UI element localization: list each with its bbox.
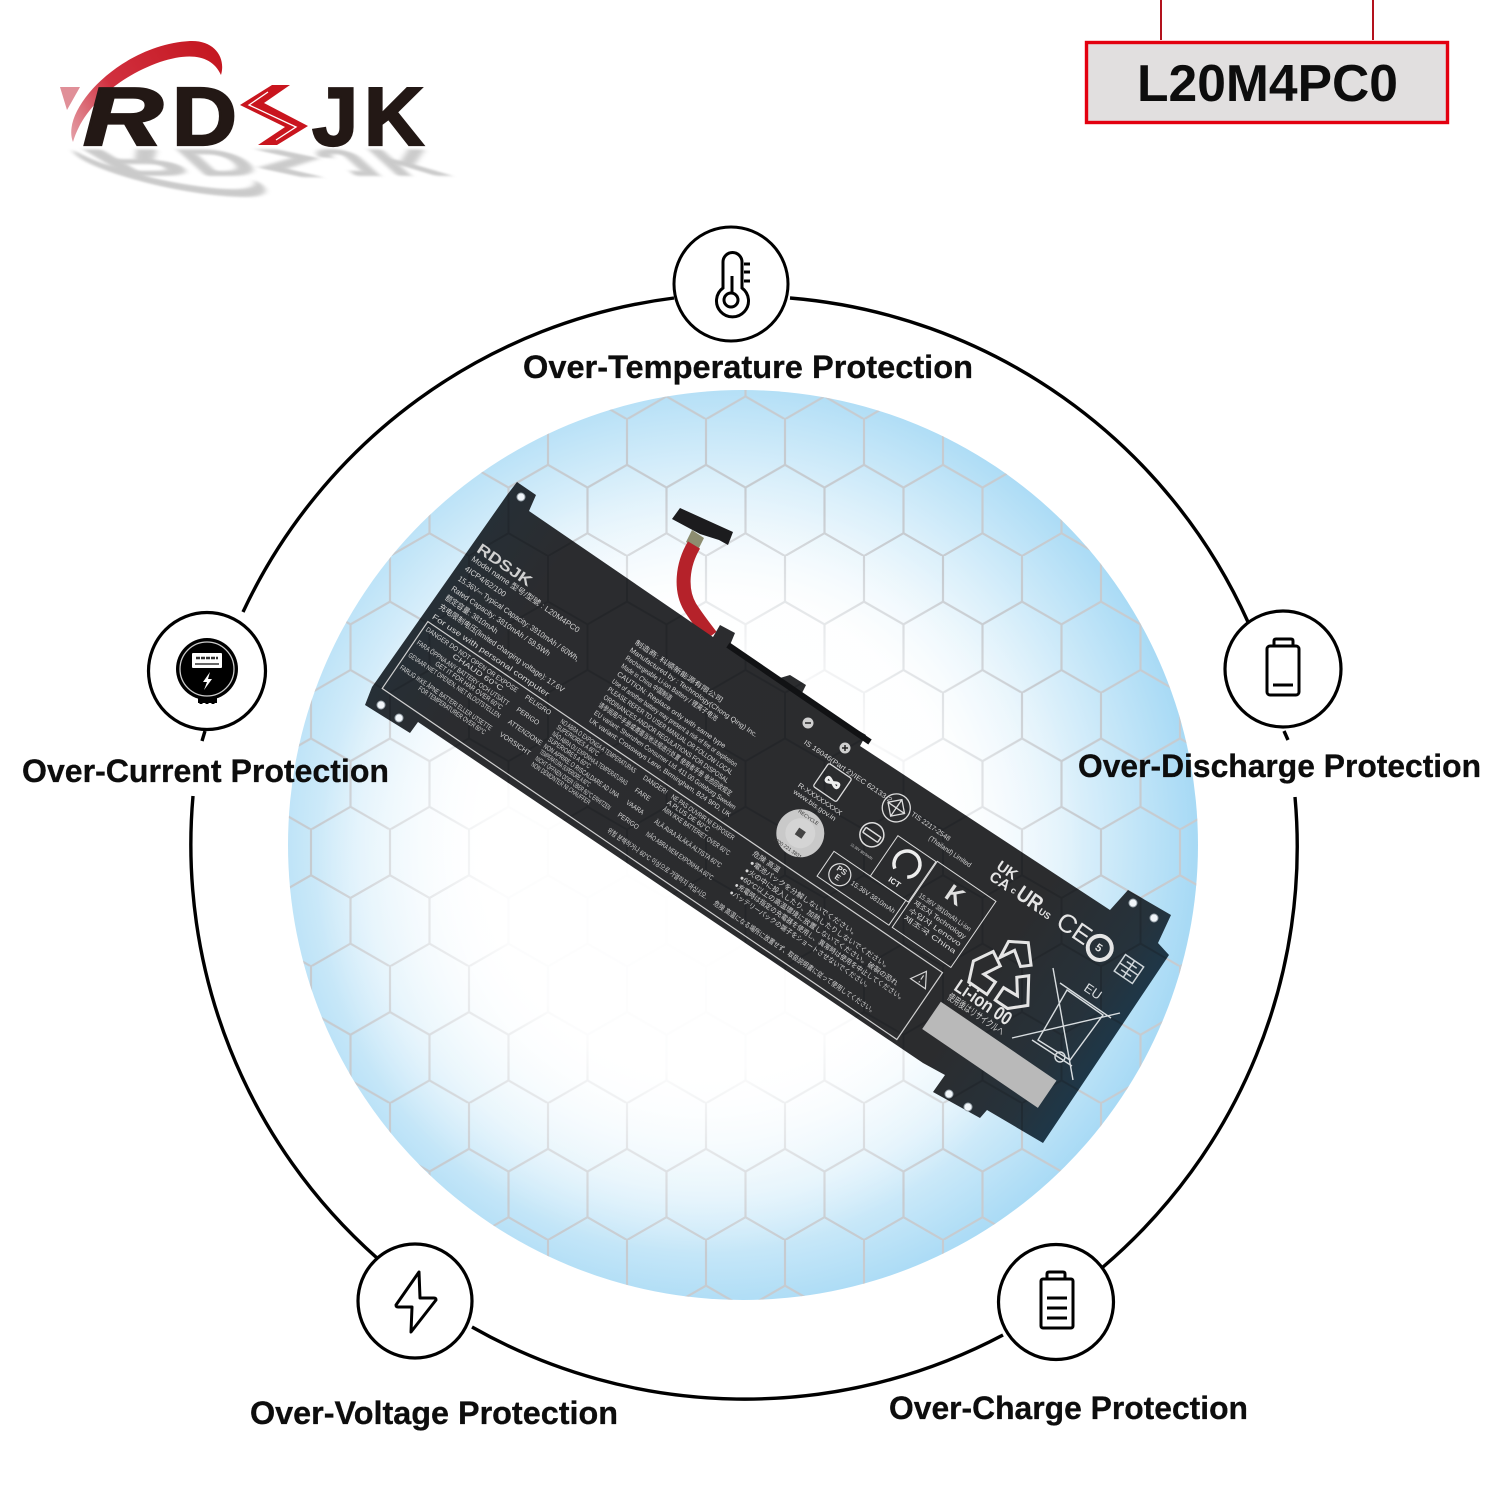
specification text: Model name 型号/型號 : L20M4PC0 xyxy=(470,554,583,635)
battery wires and connector xyxy=(672,508,733,636)
battery xyxy=(360,480,1175,1150)
outer ring xyxy=(191,298,1297,1399)
manufacturer text: UK variant: Crossways Lane, Birmingham, B24 9PD, UK xyxy=(587,717,732,819)
specification text: For use with personal computer xyxy=(430,612,552,699)
warning text middle: VORSICHT xyxy=(498,731,532,758)
S mark: 5 xyxy=(1093,942,1104,955)
label: over-charge: Over-Charge Protection xyxy=(889,1390,1248,1426)
manufacturer text: 请参阅用户手册或遵循当地法规进行处置 使用者手册 电池回收规定 xyxy=(597,700,734,798)
specification text: 额定容量: 3810mAh xyxy=(443,592,500,636)
PSE box xyxy=(817,851,906,925)
warning text right: ÄLÄ AVAA ÄLÄKÄ ALTISTA 60°C xyxy=(653,818,723,870)
UR mark: UR xyxy=(1012,881,1048,916)
warning text right: NE PAS OUVRIR NI EXPOSER xyxy=(669,794,735,842)
BIS mark: R-XXXXXXXX xyxy=(796,782,843,817)
warning text right: PERIGO xyxy=(616,812,640,831)
grey blank label xyxy=(922,1002,1056,1108)
warning text right: A PLUS DE 60°C xyxy=(666,799,711,834)
recycle disc xyxy=(767,800,834,867)
warning text left: FOR TEMPERATURER OVER 60°C xyxy=(417,685,487,736)
TIS text xyxy=(904,811,978,869)
specification text xyxy=(430,554,600,705)
manufacturer text: Rechargeable Li-ion Battery / 锂离子电池 xyxy=(624,653,720,723)
node: over-temperature xyxy=(674,227,788,341)
KC box: 15.36V 3810mAh Li-ion xyxy=(917,892,972,933)
warning text right: DANGER! xyxy=(641,775,668,796)
label: over-current: Over-Current Protection xyxy=(22,753,389,789)
warning text right: FARE xyxy=(633,787,652,803)
recycling circle mark: 15.36V 3810mAh xyxy=(850,842,874,861)
logo letters JK: K xyxy=(364,70,424,163)
manufacturer text: EU variant: Shenzhen Consumer Ltd. 411 00 Goteborg Sweden xyxy=(592,710,737,811)
warning text right: ÅBN IKKE BATTERIET OVER 60°C xyxy=(661,805,732,857)
warning text middle xyxy=(494,694,637,818)
icon: electric meter xyxy=(176,638,238,704)
PSE box: 15.36V 3810mAh xyxy=(849,880,896,915)
logo reflection xyxy=(62,142,476,197)
japanese warning text: 危険 高温 xyxy=(751,849,782,874)
japanese warning text xyxy=(712,847,928,1026)
warning text left: GET IT FOR HÄR OVER 60°C xyxy=(433,660,504,712)
KC box: K xyxy=(940,880,970,912)
warning text left: CHAUD 60°C xyxy=(451,652,505,693)
BIS mark: www.bis.gov.in xyxy=(791,788,837,823)
PSE box: PS xyxy=(835,864,849,878)
model number tag: L20M4PC0 xyxy=(1137,55,1398,113)
ICT box: ICT xyxy=(887,875,902,890)
ICT box xyxy=(870,836,936,902)
manufacturer text: Manufactured by : Technology(Chong Qing) Inc. xyxy=(628,647,758,739)
S mark xyxy=(1083,931,1116,965)
TIS text: (Thailand) Limited xyxy=(927,835,972,869)
logo reflection: D xyxy=(163,142,275,184)
manufacturer text xyxy=(582,638,784,819)
specification text: 充电限制电压(limited charging voltage): 17.6V xyxy=(437,601,567,695)
specification text: Rated Capacity: 3810mAh / 58.5Wh xyxy=(450,584,552,658)
manufacturer text: CAUTION: Replace only with same type xyxy=(615,671,727,750)
logo letters RD: R xyxy=(83,70,163,163)
warning text middle: ATTENZIONE xyxy=(506,719,544,747)
manufacturer text: ORDINANCES AND/OR REGULATIONS FOR DISPOSAL xyxy=(602,694,730,785)
warning text left: FARLIG IKKE ÅPNE BATTERI ELLER UTSETTE xyxy=(398,663,494,732)
japanese warning text: ●充電時は指定の充電器を使用し、異常時は使用を中止してください。 xyxy=(733,880,907,1003)
warning text middle: PELIGRO xyxy=(523,694,552,717)
icon: thermometer xyxy=(716,252,750,317)
icon: lightning bolt xyxy=(396,1272,436,1332)
warning panel frame xyxy=(382,622,943,1040)
specification text: 4ICP4/62/100 xyxy=(463,564,508,599)
warning text right: NÃO ABRA NEM EXPONHA A 60°C xyxy=(644,829,715,882)
warning text middle: NON DÉMONTER NI CHAUFFER xyxy=(529,760,592,807)
recycle disc: 1800 221 3831 xyxy=(772,837,803,860)
label: over-temperature: Over-Temperature Protection xyxy=(523,349,973,385)
logo reflection: K xyxy=(355,142,461,184)
logo letters JK xyxy=(312,70,424,163)
standard text: IS 16046(Part 2)/IEC 62133-2 xyxy=(802,739,893,804)
warning text middle: TEMPERATURA SUPERIORE A 60°C xyxy=(538,748,592,789)
crossed bin mark xyxy=(1012,968,1120,1080)
model number tag xyxy=(1086,0,1448,122)
node: over-charge xyxy=(998,1244,1114,1360)
warning text right xyxy=(605,775,745,901)
battery brand: RDSJK xyxy=(473,541,535,590)
battery body xyxy=(365,482,1171,1143)
cable channel xyxy=(728,645,870,742)
logo letters RD: D xyxy=(172,70,237,163)
japanese recycle text: 使用後はリサイクルへ xyxy=(945,990,1007,1038)
warning text right: 위험 분해하거나 60°C 이상으로 가열하지 마십시오. xyxy=(605,826,710,901)
central hexagon circle background xyxy=(288,390,1198,1300)
Li-ion text: Li-ion 00 xyxy=(950,976,1016,1030)
logo swoosh xyxy=(71,41,222,142)
square code mark xyxy=(1114,955,1144,983)
logo letters RD xyxy=(83,70,237,163)
specification text: 15.36V⎓ Typical Capacity: 3910mAh / 60Wh, xyxy=(456,574,581,663)
UR mark: US xyxy=(1037,906,1053,922)
japanese warning text: ●バッテリーパックの端子をショートさせないでください。 xyxy=(728,888,873,991)
BIS mark xyxy=(791,755,861,824)
warning text middle: NÃO ABRA OU EXPONHA A TEMPERATURAS xyxy=(550,729,630,787)
manufacturer text: Made in China 中国制造 xyxy=(620,661,674,703)
CE mark: CE xyxy=(1051,906,1098,951)
UKCA mark: CA xyxy=(986,868,1014,895)
warning triangle xyxy=(911,966,934,989)
PSE box: E xyxy=(833,872,843,883)
japanese warning text: ●60°C以上の高温環境に放置しないでください。破裂の恐れ xyxy=(738,873,900,987)
japanese warning text: ●電池パックを分解しないでください。 xyxy=(748,858,861,939)
logo triangle xyxy=(60,87,80,110)
recycling circle mark xyxy=(850,818,890,861)
polarity screws xyxy=(802,718,850,754)
logo letters JK: J xyxy=(312,70,358,163)
TIS mark xyxy=(877,788,916,827)
battery hexagon reflection xyxy=(360,480,1175,1150)
KC box: 제조자 Technology xyxy=(912,898,969,941)
warning text middle: SUPERIORES A 60°C xyxy=(555,723,601,758)
icon: full battery xyxy=(1041,1272,1073,1328)
KC box xyxy=(892,861,996,967)
KC box: 제조국 China xyxy=(902,914,958,956)
warning text middle: NICHT ÖFFNEN ODER ÜBER 60°C ERHITZEN xyxy=(533,755,612,812)
node: over-discharge xyxy=(1225,611,1341,727)
logo reflection: R xyxy=(74,142,201,184)
logo chevrons xyxy=(240,85,308,145)
warning text left: DANGER DO NOT OPEN OR EXPOSE xyxy=(424,627,519,694)
mounting holes xyxy=(377,493,1158,1111)
warning text middle: SUPERIORES A 60°C xyxy=(546,736,592,771)
warning text left: GEVAAR NIET OPENEN, NIET BLOOTSTELLEN xyxy=(407,652,501,720)
logo: RDSJK xyxy=(60,41,476,197)
warning text middle: NON APRIRE O RISCALDARE AD UNA xyxy=(542,743,620,800)
recycling arrows xyxy=(962,923,1057,1017)
UR mark xyxy=(1006,877,1059,924)
warning text middle: NO ABRA O EXPONGA A TEMPERATURAS xyxy=(559,718,637,775)
japanese warning text: ●火の中に投入したり、加熱したりしないでください。 xyxy=(743,865,893,971)
label: over-voltage: Over-Voltage Protection xyxy=(250,1395,618,1431)
warning text left xyxy=(394,627,519,738)
recycle disc: RECYCLE xyxy=(797,809,820,827)
logo reflection: J xyxy=(301,142,394,184)
TIS text: TIS 2217-2548 xyxy=(909,811,952,843)
crossed bin mark: EU xyxy=(1081,980,1105,1003)
UR mark: c xyxy=(1009,885,1019,896)
warning text left: FARA ÖPPNA ANY BATTERY OCH UTSÄTT xyxy=(415,639,511,708)
manufacturer text: Use of another battery may present a risk of fire or explosion xyxy=(610,678,738,769)
battery label print xyxy=(382,515,1150,1131)
warning text right: VAARA xyxy=(624,800,645,817)
manufacturer text: PLEASE REFER TO USER MANUAL OR FOLLOW LOCAL xyxy=(606,686,734,777)
warning text middle: PERIGO xyxy=(515,707,541,727)
UKCA mark xyxy=(986,858,1021,895)
KC box: 수입자 Lenovo xyxy=(907,906,963,948)
UKCA mark: UK xyxy=(993,858,1021,884)
node: over-voltage xyxy=(358,1244,472,1358)
japanese warning text: 危険 高温になる場所に放置せず、取扱説明書に従って使用してください。 xyxy=(712,899,878,1016)
node: over-current xyxy=(148,612,266,730)
icon: low battery xyxy=(1267,639,1299,695)
manufacturer text: 制造商: 科顺新能源有限公司 xyxy=(633,638,725,705)
label: over-discharge: Over-Discharge Protection xyxy=(1078,748,1481,784)
